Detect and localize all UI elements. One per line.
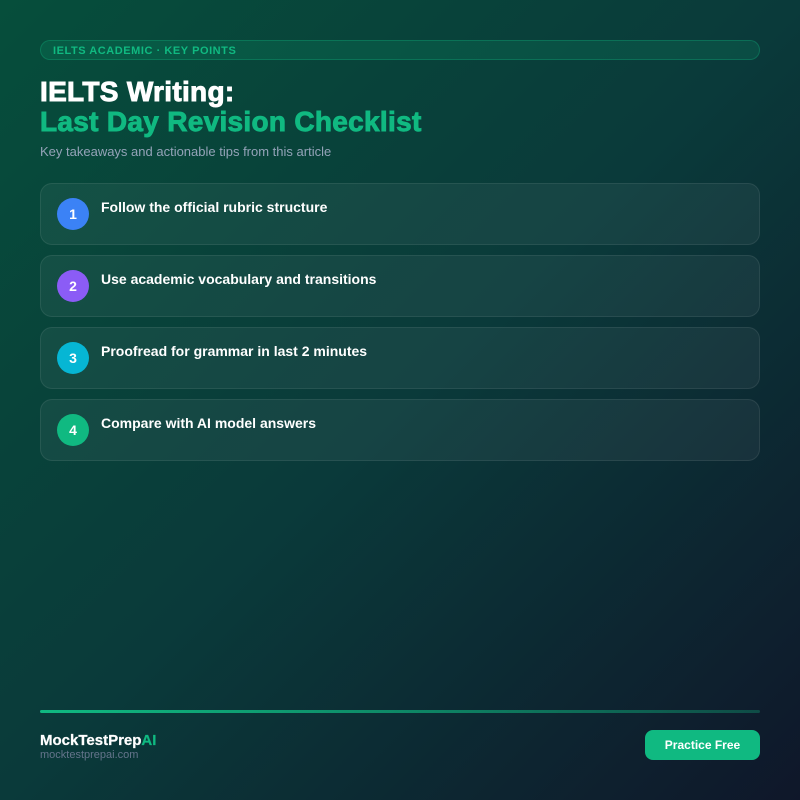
footer accent rule: [40, 710, 760, 713]
number badge 4: 4: [69, 422, 77, 438]
tag pill: [40, 40, 760, 60]
panel: point 1: [40, 183, 760, 245]
tag pill: IELTS ACADEMIC · KEY POINTS: [53, 45, 236, 57]
point 1 text: Follow the official rubric structure: [101, 199, 327, 215]
number badge 2: 2: [69, 278, 77, 294]
title: Last Day Revision Checklist: [40, 106, 422, 137]
number badge 1: [57, 198, 89, 230]
point 2 text: Use academic vocabulary and transitions: [101, 271, 376, 287]
panel: point 3: [40, 327, 760, 389]
panel: point 2: [40, 255, 760, 317]
number badge 3: 3: [69, 350, 77, 366]
number badge 4: [57, 414, 89, 446]
call to action button: Practice Free: [665, 738, 740, 752]
point 3 text: Proofread for grammar in last 2 minutes: [101, 343, 367, 359]
call to action button: [645, 730, 760, 760]
number badge 1: 1: [69, 206, 77, 222]
title: IELTS Writing:: [40, 76, 234, 107]
panel: point 4: [40, 399, 760, 461]
title: [40, 76, 422, 138]
brand name: MockTestPrepAI: [40, 732, 156, 749]
brand url: mocktestprepai.com: [40, 749, 138, 761]
subtitle: Key takeaways and actionable tips from this article: [40, 144, 331, 159]
number badge 3: [57, 342, 89, 374]
point 4 text: Compare with AI model answers: [101, 415, 316, 431]
number badge 2: [57, 270, 89, 302]
